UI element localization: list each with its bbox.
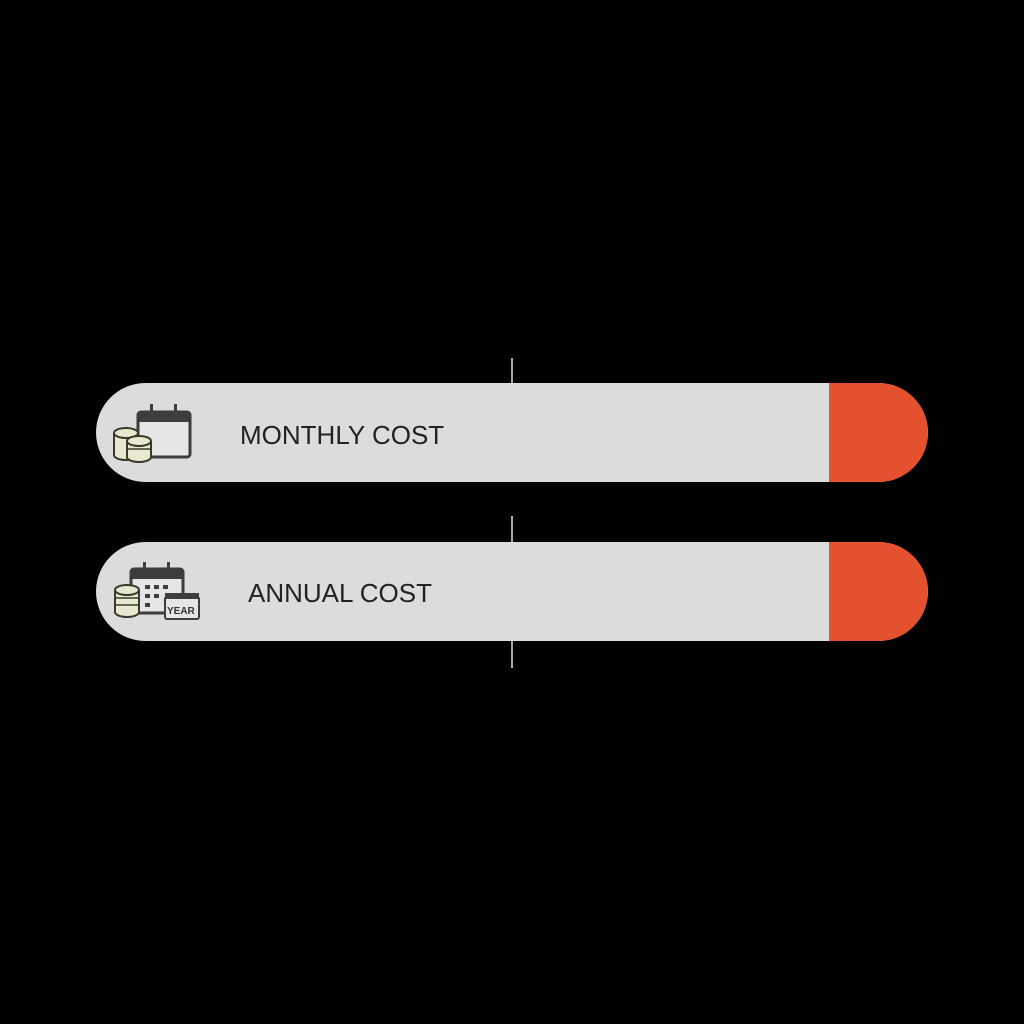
- icon: yearly calendar with coins: [115, 562, 199, 619]
- label: monthly cost: MONTHLY COST: [240, 420, 444, 450]
- bar: monthly cost: [96, 383, 929, 482]
- bar: annual cost: [96, 542, 929, 641]
- icon: calendar with coins: [114, 404, 190, 462]
- label: annual cost: ANNUAL COST: [248, 578, 432, 608]
- icon: yearly calendar with coins: YEAR: [167, 606, 196, 617]
